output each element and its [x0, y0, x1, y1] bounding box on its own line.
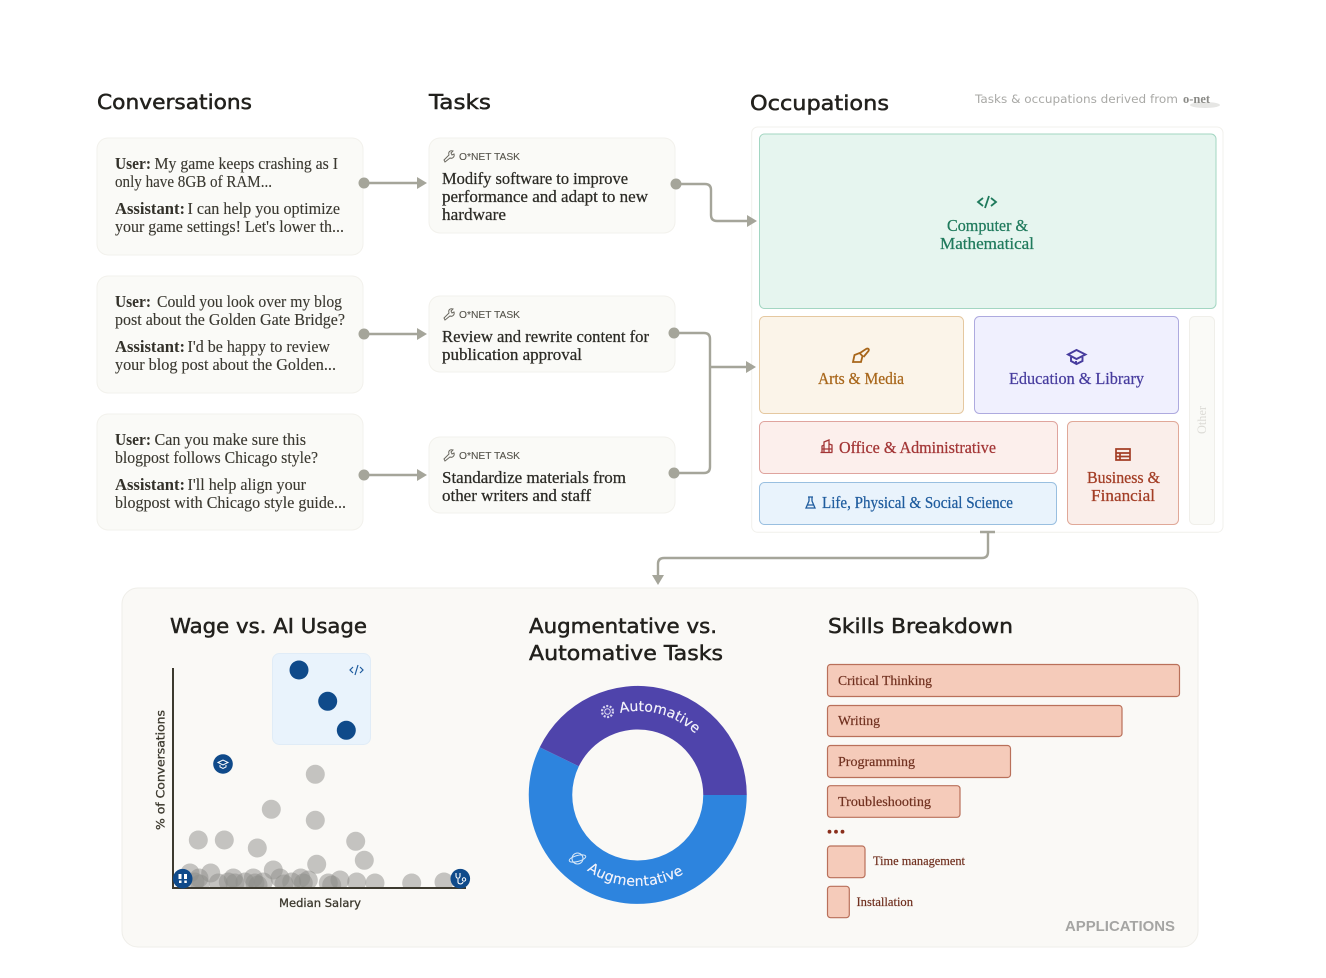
segment: automative — [540, 686, 747, 795]
axes — [173, 668, 466, 888]
bar: Troubleshooting: Troubleshooting — [838, 794, 931, 809]
arrow: task 1 to computer occupations — [670, 178, 757, 227]
bar: Installation: Installation — [856, 895, 914, 909]
panel: conversation 2: post about the Golden Gate Bridge? — [115, 310, 345, 329]
panel: conversation 1: Assistant: — [115, 199, 185, 218]
panel: conversation 1: My game keeps crashing as I — [154, 154, 338, 173]
panel: conversation 3: blogpost follows Chicago style? — [115, 448, 318, 467]
panel: conversation 2: I'd be happy to review — [188, 337, 331, 356]
arrow: task 2 and task 3 to arts and education — [668, 328, 756, 478]
panel: conversation 1 — [97, 138, 363, 255]
bar: Programming: Programming — [838, 754, 915, 769]
panel: task 3: Standardize materials from — [442, 468, 626, 487]
heading: Augmentative vs. Automative Tasks: Augmentative vs. — [529, 614, 717, 638]
occupation: Life, Physical & Social Science: Life, Physical & Social Science — [822, 493, 1013, 512]
panel: conversation 1: your game settings! Let's lower th... — [115, 217, 344, 236]
occupation: Life, Physical & Social Science — [760, 482, 1056, 524]
panel: conversation 1: only have 8GB of RAM... — [115, 172, 272, 191]
arrow: conversation 1 to task 1 — [358, 177, 427, 189]
label: APPLICATIONS: APPLICATIONS — [1065, 918, 1175, 935]
heading: Conversations: Conversations — [97, 90, 252, 114]
icon: gear — [602, 706, 613, 717]
bar: Critical Thinking: Critical Thinking — [838, 673, 932, 688]
chart: wage vs AI usage scatter — [154, 654, 470, 910]
occupation: Computer & Mathematical: Computer & — [947, 216, 1028, 235]
panel: task 3: O*NET TASK — [459, 450, 520, 462]
icon: education point — [213, 754, 233, 774]
panel: conversation 3 — [97, 414, 363, 530]
chart: skills breakdown — [828, 664, 1180, 918]
heading: Skills Breakdown: Skills Breakdown — [828, 614, 1013, 638]
heading: Augmentative vs. Automative Tasks — [529, 614, 723, 665]
panel: task 2: Review and rewrite content for — [442, 327, 649, 346]
source note: derived from o-net: Tasks & occupations derived from — [974, 92, 1178, 106]
bar: Troubleshooting — [828, 786, 960, 817]
occupation: Business & Financial: Business & — [1087, 468, 1160, 487]
occupation: Business & Financial: Financial — [1091, 486, 1155, 505]
source note: derived from o-net — [974, 92, 1220, 108]
panel: task 1 — [429, 138, 675, 233]
bar: Programming — [828, 746, 1010, 778]
panel: conversation 3: Assistant: — [115, 475, 185, 494]
panel: conversation 3: User: — [115, 430, 151, 449]
occupation: Computer & Mathematical — [760, 134, 1216, 308]
occupation: Office & Administrative — [760, 422, 1058, 474]
arrow: occupations to applications — [652, 532, 995, 585]
bar: Installation — [828, 886, 914, 918]
occupation: Arts & Media — [760, 316, 964, 414]
occupation: Education & Library — [974, 316, 1178, 414]
occupation: Education & Library: Education & Library — [1009, 369, 1145, 388]
panel: conversation 2 — [97, 276, 363, 393]
icon: footprints point — [173, 869, 192, 888]
panel: conversation 3: Can you make sure this — [154, 430, 306, 449]
panel: task 2: O*NET TASK — [459, 309, 520, 321]
bar: Time management: Time management — [873, 854, 966, 868]
arrow: conversation 2 to task 2 — [358, 328, 427, 340]
occupation: Business & Financial — [1068, 422, 1178, 524]
panel: task 2 — [429, 296, 675, 372]
icon: planet — [569, 853, 586, 864]
heading: Tasks: Tasks — [428, 90, 491, 114]
panel: conversation 1: User: — [115, 154, 151, 173]
occupation: Other — [1190, 316, 1214, 524]
panel: conversation 3: blogpost with Chicago style guide... — [115, 493, 346, 512]
heading: Occupations: Occupations — [750, 91, 889, 115]
panel: task 2: publication approval — [442, 345, 582, 364]
panel: task 1: O*NET TASK — [459, 151, 520, 163]
panel: task 3: other writers and staff — [442, 486, 591, 505]
panel: conversation 2: User: — [115, 292, 151, 311]
occupation: Office & Administrative: Office & Administrative — [839, 438, 996, 457]
bar: Critical Thinking — [828, 664, 1180, 696]
x axis label: Median Salary — [279, 896, 361, 910]
panel: task 3 — [429, 437, 675, 513]
segment: augmentative — [529, 747, 747, 904]
heading: Augmentative vs. Automative Tasks: Automative Tasks — [529, 641, 723, 665]
source note: derived from o-net: o-net — [1183, 92, 1211, 106]
panel: conversation 2: your blog post about the Golden... — [115, 355, 336, 374]
gray occupation points — [180, 765, 454, 894]
heading: Wage vs. AI Usage: Wage vs. AI Usage — [170, 614, 367, 638]
ellipsis dots — [828, 830, 844, 834]
icon: stethoscope point — [450, 869, 470, 888]
label: Augmentative: Augmentative — [586, 864, 683, 886]
bar: Writing — [828, 706, 1122, 736]
bar: Time management — [828, 846, 966, 878]
bar: Writing: Writing — [838, 713, 880, 728]
panel: task 1: hardware — [442, 205, 506, 224]
highlight box: computer occupations — [272, 654, 370, 744]
panel: task 1: Modify software to improve — [442, 169, 628, 188]
panel: conversation 2: Assistant: — [115, 337, 185, 356]
panel: conversation 3: I'll help align your — [188, 475, 306, 494]
label: Automative: Automative — [620, 701, 699, 733]
panel: conversation 2: Could you look over my blog — [157, 292, 343, 311]
chart: augmentative vs automative donut — [528, 686, 747, 904]
panel: task 1: performance and adapt to new — [442, 187, 649, 206]
y axis label: % of Conversations — [154, 710, 168, 830]
occupation: Arts & Media: Arts & Media — [818, 369, 905, 388]
occupation: Computer & Mathematical: Mathematical — [940, 234, 1034, 253]
arrow: conversation 3 to task 3 — [358, 469, 427, 481]
occupation: Other: Other — [1194, 405, 1209, 434]
panel: occupations treemap — [752, 127, 1223, 532]
panel: conversation 1: I can help you optimize — [188, 199, 340, 218]
panel: applications — [122, 588, 1198, 947]
